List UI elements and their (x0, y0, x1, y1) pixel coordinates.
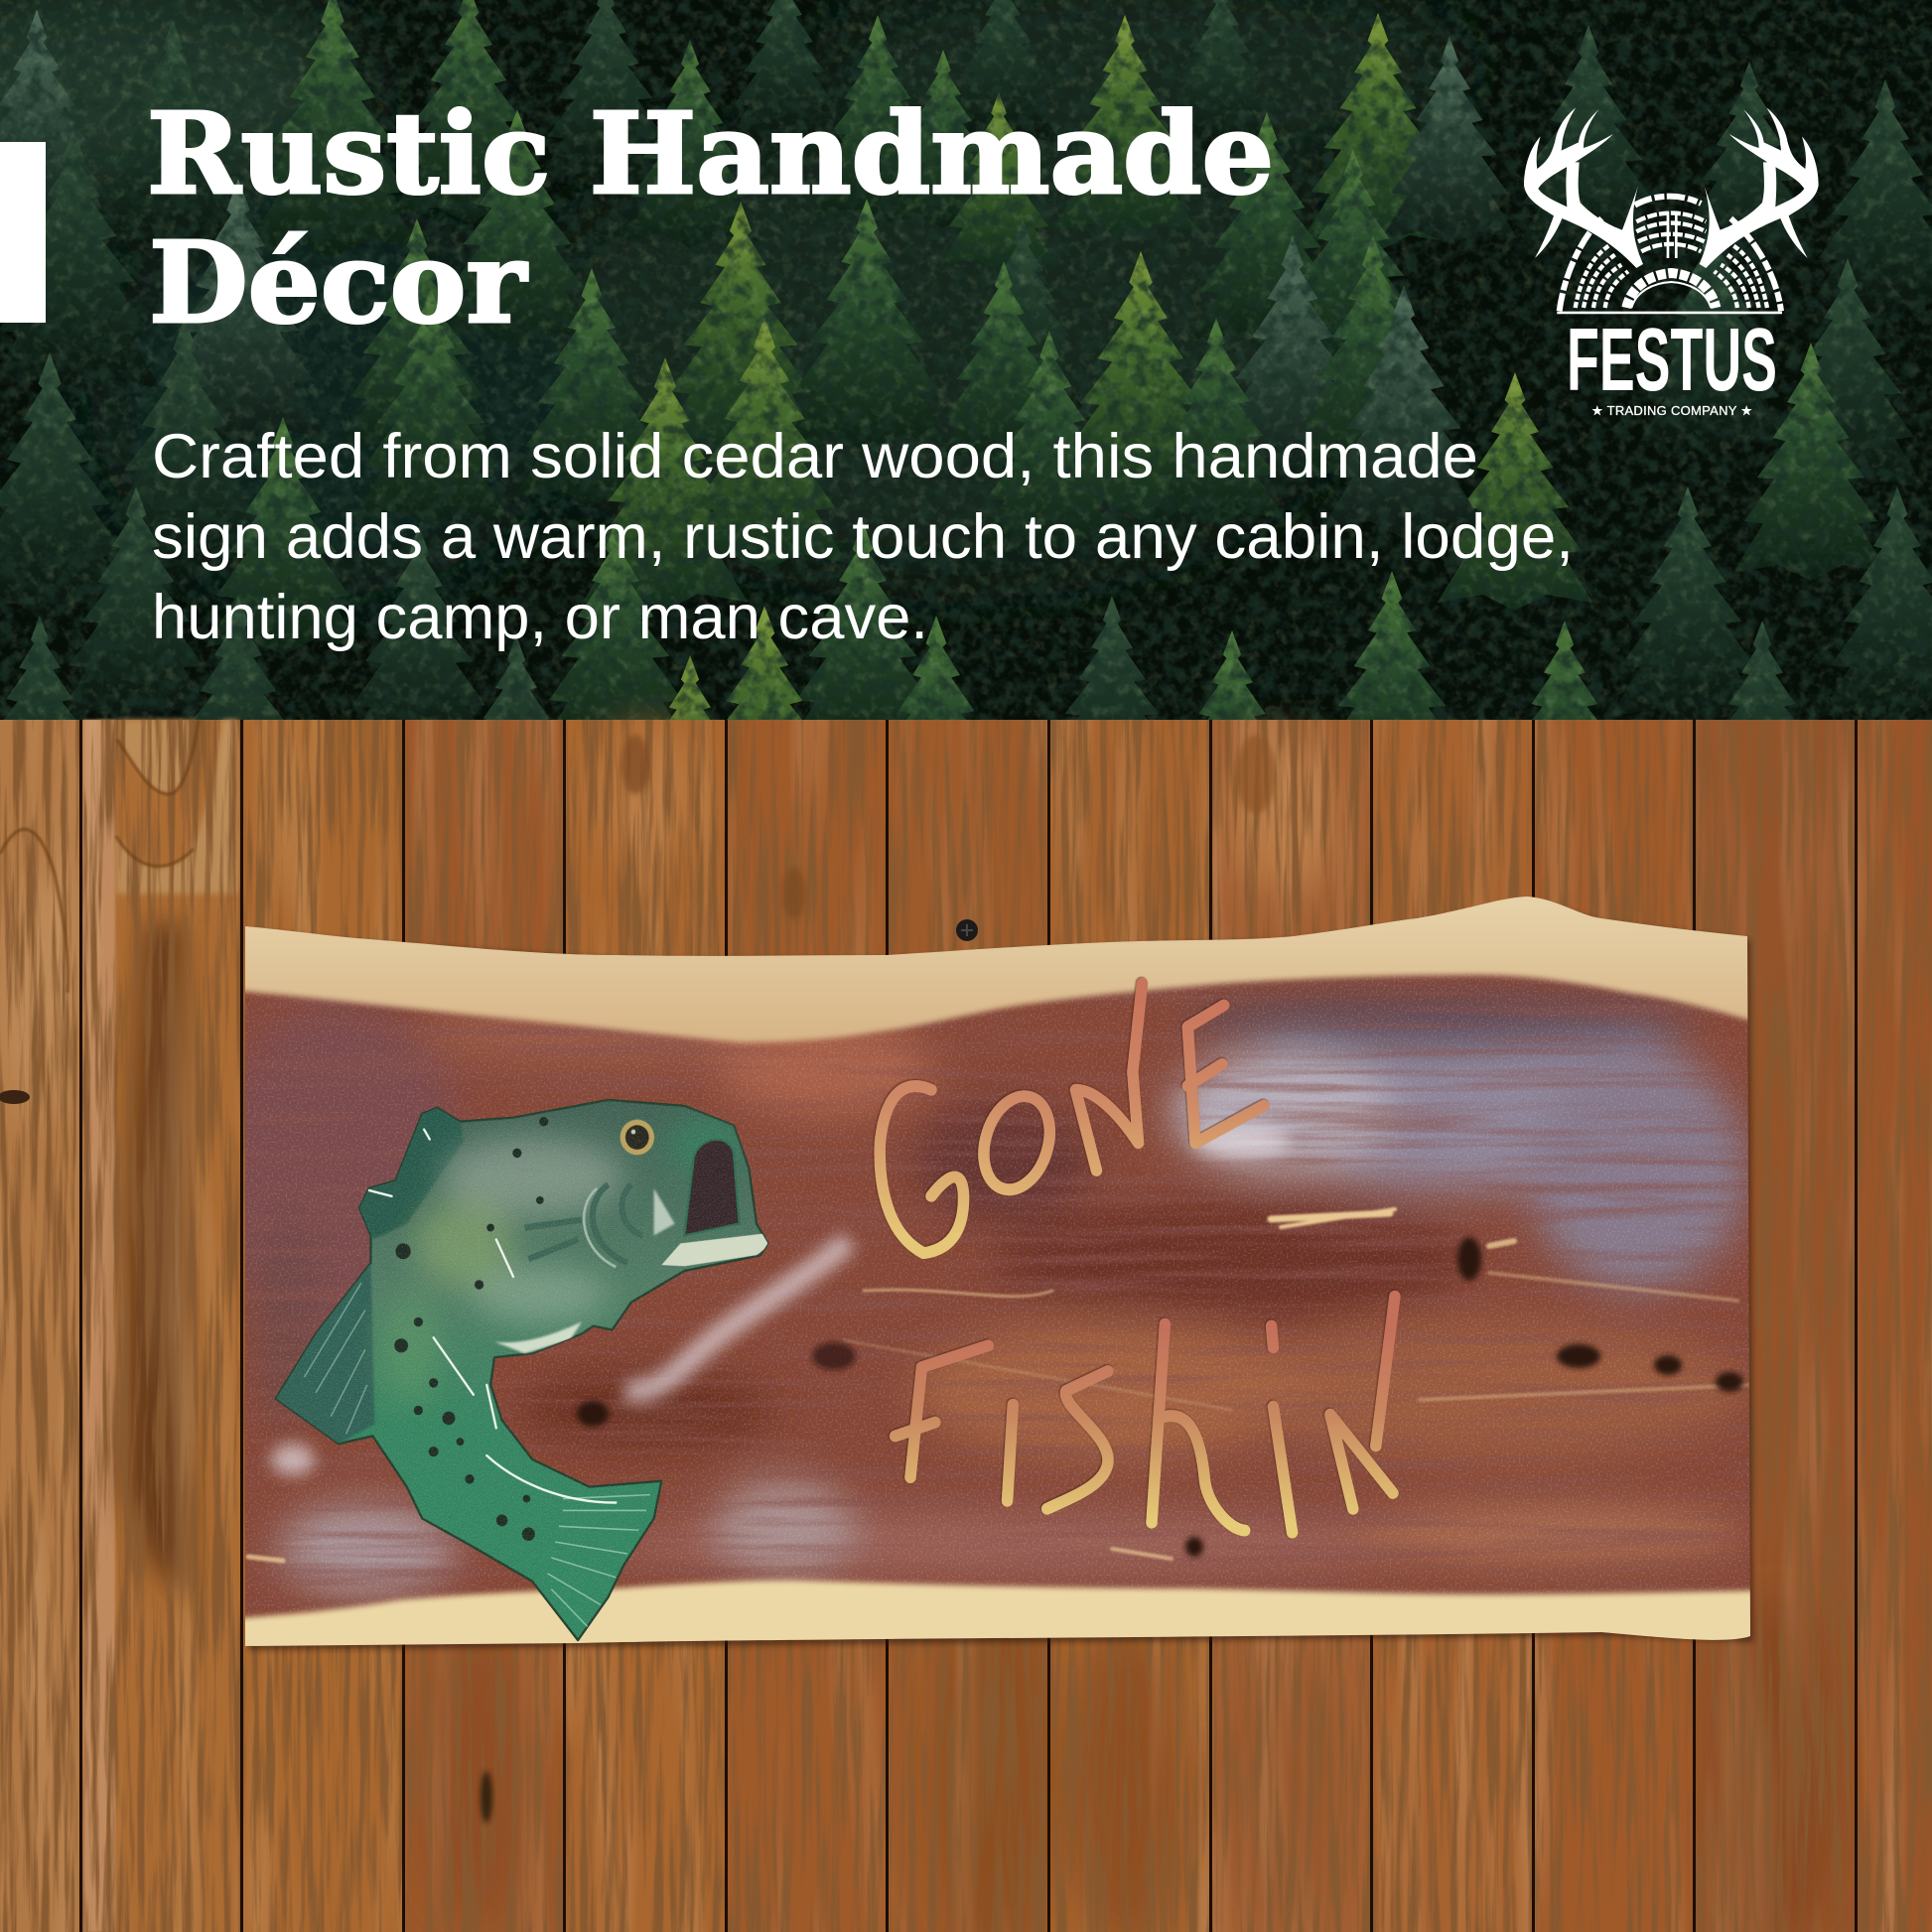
icon: carved green bass fish (274, 1098, 775, 1648)
mouth (684, 1140, 740, 1235)
white accent bar (0, 142, 46, 323)
pectoral tail fin (276, 1263, 374, 1444)
spots (394, 1117, 548, 1541)
gill plate (525, 1184, 642, 1263)
text block: description: Crafted from solid cedar wood, this handmade (152, 422, 1478, 491)
dark patch on plank two (121, 923, 191, 1608)
panel: wooden plank background (0, 720, 1932, 1932)
silver highlights (625, 1241, 849, 1391)
wordmark: FESTUS: FESTUS (1567, 311, 1777, 410)
text block: description: sign adds a warm, rustic touch to any cabin, lodge, (152, 502, 1574, 572)
highlights (369, 1130, 616, 1503)
light strip and cathedral grain on plank two (83, 720, 115, 1932)
left antler (1524, 107, 1643, 268)
sign carving: Gone Fishin' letters (880, 984, 1395, 1533)
sapwood: top band (238, 884, 1757, 1042)
eye (621, 1120, 654, 1155)
title: Rustic Handmade (147, 89, 1274, 219)
panel: forest header background (0, 0, 1932, 720)
word: GONE (880, 984, 1264, 1253)
sapwood: bottom band (238, 1581, 1757, 1658)
icon: wall screw (956, 919, 978, 941)
right antler (1700, 107, 1819, 268)
knots (577, 1237, 1743, 1557)
text block: description: hunting camp, or man cave. (152, 583, 928, 652)
title: Décor (149, 218, 528, 348)
tagline: Trading Company: ★ TRADING COMPANY ★ (1591, 403, 1752, 418)
tail rays (547, 1495, 650, 1628)
stump (1557, 197, 1782, 313)
panel: cedar sign (208, 884, 1757, 1658)
logo: Festus Trading Company (1524, 107, 1819, 418)
front row of fir trees (0, 199, 1932, 720)
grain lines and knots (0, 720, 199, 993)
body sheen (380, 1118, 745, 1405)
text block: description (152, 422, 1574, 652)
word: FISHIN (896, 1297, 1395, 1533)
dorsal fin (357, 1108, 464, 1239)
jaw (661, 1234, 769, 1266)
back row of fir trees (0, 0, 1932, 506)
title (147, 89, 1274, 348)
icon: antlers and tree stump (1524, 107, 1819, 313)
